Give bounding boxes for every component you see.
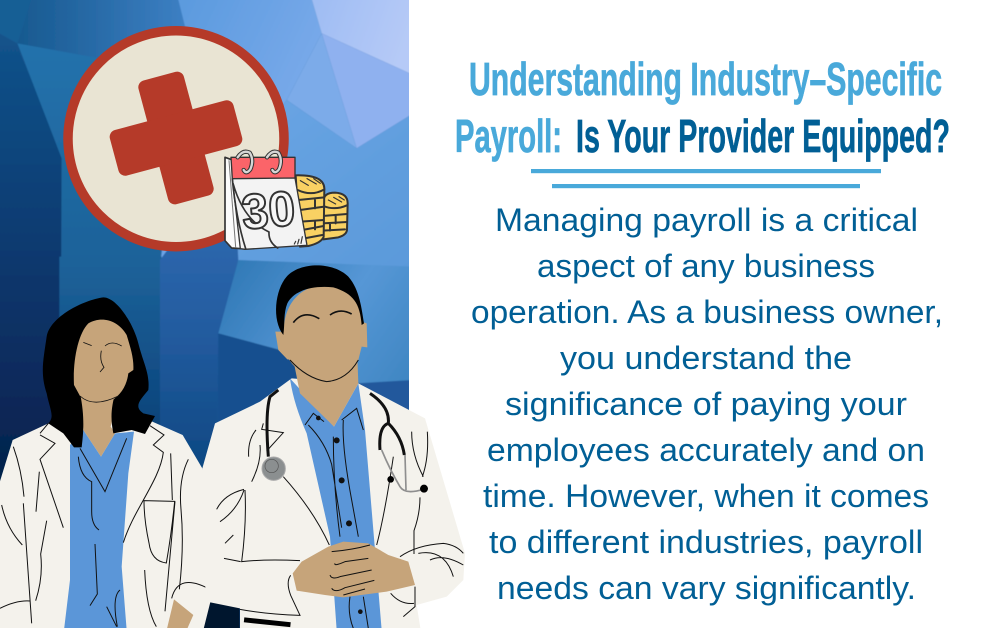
figure: female doctor [0,297,213,628]
body text paragraph: significance of paying your [505,386,907,422]
body text paragraph: Managing payroll is a critical [495,202,918,238]
icon: calendar and coins [225,152,348,249]
panel: polygon blue background [0,0,413,628]
heading: title [455,53,950,162]
body text paragraph: to different industries, payroll [489,524,923,560]
icon: calendar and coins: 30 [239,181,297,240]
heading line 2 lead: Payroll: [455,110,562,162]
large coin stack [296,175,324,247]
double rule under heading [531,169,881,188]
body text paragraph: needs can vary significantly. [497,570,916,606]
body text paragraph: aspect of any business [537,248,875,284]
body text paragraph: employees accurately and on [487,432,925,468]
figure: male doctor [200,265,465,628]
body text paragraph: you understand the [560,340,852,376]
icon: medical cross badge [68,31,284,247]
body text paragraph [471,202,943,606]
illustration: two doctors [0,265,465,628]
body text paragraph: time. However, when it comes [483,478,929,514]
small coin stack [322,193,348,239]
body text paragraph: operation. As a business owner, [471,294,943,330]
